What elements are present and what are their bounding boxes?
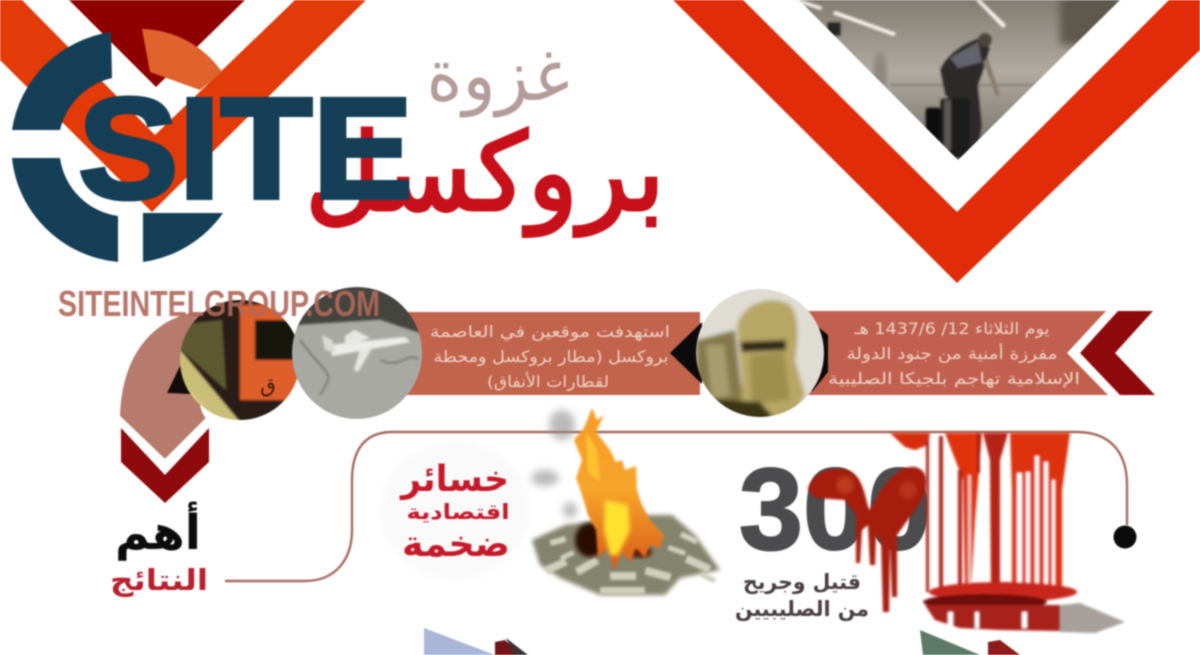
black arc behind portrait <box>812 322 828 392</box>
title: Brussels: بروكسل <box>305 111 665 237</box>
casualties caption <box>735 570 869 621</box>
ribbon text: targets <box>430 322 670 392</box>
top left chevron <box>0 0 366 212</box>
top right chevron <box>673 0 1200 283</box>
heading: most important: أهم <box>115 501 201 561</box>
ribbon text: targets: بروكسل (مطار بروكسل ومحطة <box>434 347 668 367</box>
photo: burnt train: ق <box>260 373 276 397</box>
white band around arrow tip <box>118 418 210 463</box>
title: ghazwa: غزوة <box>426 33 570 118</box>
ribbon text: targets: لقطارات الأنفاق) <box>487 371 609 392</box>
faint watermark <box>380 440 530 580</box>
website address: SITEINTELGROUP.COM <box>58 283 380 324</box>
ribbon text: date and attack: مفرزة أمنية من جنود الدولة <box>846 343 1058 364</box>
dark red diamond <box>69 0 245 87</box>
dark red down chevron <box>121 428 209 503</box>
photo: airport plane <box>290 285 425 421</box>
blood over number <box>808 467 926 612</box>
casualties number: 300 <box>739 444 931 574</box>
blood pool <box>929 582 1077 602</box>
logo orange segment <box>142 29 222 90</box>
text: economic losses: اقتصادية <box>406 500 510 524</box>
black pointer behind portrait <box>670 322 702 384</box>
text: economic losses <box>399 459 510 565</box>
black pointer left of train photo <box>167 335 215 395</box>
logo wordmark: SITE <box>78 68 413 229</box>
ribbon text: targets: استهدفت موقعين في العاصمة <box>430 322 670 342</box>
photo: burnt train <box>179 299 298 421</box>
dark embers <box>575 523 605 557</box>
ribbon text: date and attack: الإسلامية تهاجم بلجيكا الصليبية <box>828 369 1080 389</box>
SITE logo <box>12 29 413 262</box>
heading: results: النتائج <box>110 563 208 597</box>
smoke <box>531 410 577 518</box>
money pile <box>532 515 720 595</box>
panel: left ribbon <box>400 312 700 395</box>
bottom fragment: green photo <box>920 630 980 655</box>
logo ring <box>12 32 223 262</box>
bottom fragment: blue triangle <box>424 628 495 655</box>
ribbon text: date and attack <box>828 319 1080 389</box>
ribbon tail chevron <box>1080 311 1155 395</box>
text: economic losses: خسائر <box>399 459 509 500</box>
panel: right ribbon <box>800 311 1108 395</box>
icon: burning money <box>531 408 720 595</box>
ribbon text: date and attack: يوم الثلاثاء 12/ 1437/6 هـ <box>853 319 1050 339</box>
casualties caption: من الصليبيين <box>735 597 869 621</box>
flame <box>574 408 664 570</box>
curved connector arrow body <box>120 312 260 463</box>
bottom fragment: red chevrons <box>988 640 1020 655</box>
portrait: masked fighter <box>695 288 825 418</box>
blood curtain <box>890 433 1125 633</box>
casualties caption: قتيل وجريح <box>743 570 861 594</box>
connector line <box>225 432 1127 581</box>
airport photo diamond <box>795 0 1125 165</box>
text: economic losses: ضخمة <box>402 524 510 565</box>
bottom fragment: dark chevron second <box>506 638 528 655</box>
connector end dot <box>1114 526 1136 548</box>
bottom fragment: dark chevrons <box>495 640 520 655</box>
